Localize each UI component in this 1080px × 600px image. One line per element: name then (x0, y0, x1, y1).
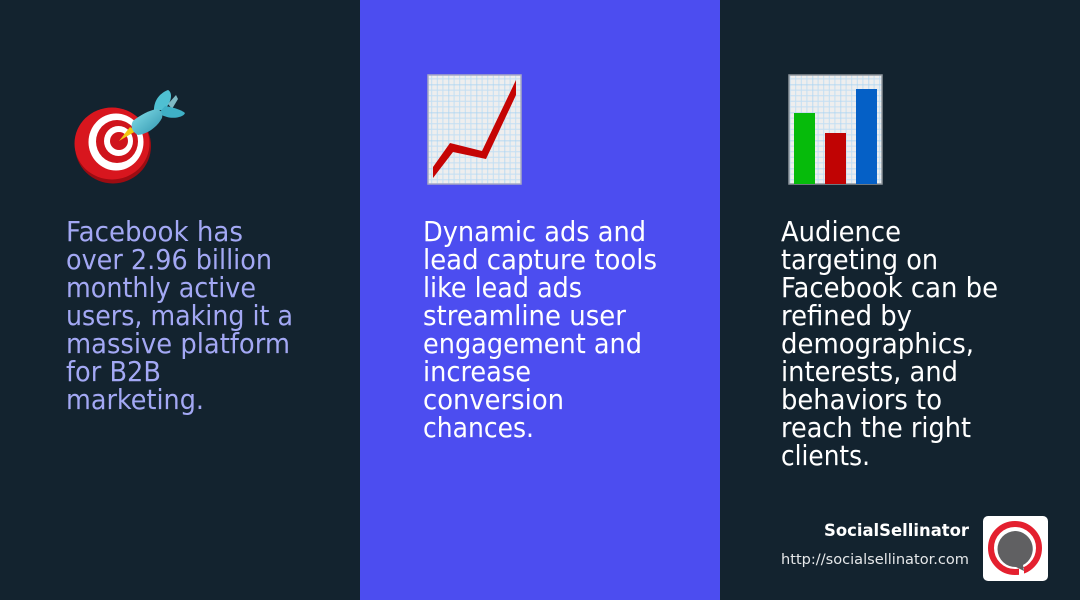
text: dynamic ads: lead capture tools (423, 243, 657, 276)
text: Facebook users: users, making it a (66, 299, 293, 332)
brand name: SocialSellinator (824, 521, 970, 541)
text: audience targeting: Audience (781, 215, 901, 248)
text: audience targeting: Facebook can be (781, 271, 998, 304)
text: dynamic ads: Dynamic ads and (423, 215, 646, 248)
text: dynamic ads: chances. (423, 411, 534, 444)
text: Facebook users: monthly active (66, 271, 256, 304)
text: audience targeting: behaviors to (781, 383, 942, 416)
text: dynamic ads (423, 215, 657, 444)
text: Facebook users: Facebook has (66, 215, 243, 248)
text: Facebook users: massive platform (66, 327, 290, 360)
text: dynamic ads: increase (423, 355, 531, 388)
logo (983, 516, 1048, 581)
icon: bar chart (789, 75, 882, 184)
brand url: http://socialsellinator.com (781, 552, 969, 568)
text: audience targeting: demographics, (781, 327, 974, 360)
text: dynamic ads: like lead ads (423, 271, 582, 304)
text: audience targeting: interests, and (781, 355, 958, 388)
panel: left background (0, 0, 360, 600)
text: audience targeting: reach the right (781, 411, 971, 444)
panel: middle background (360, 0, 720, 600)
panel: right background (720, 0, 1080, 600)
icon: rising line chart (428, 75, 521, 184)
text: Facebook users: for B2B (66, 355, 161, 388)
text: audience targeting: targeting on (781, 243, 938, 276)
text: dynamic ads: streamline user (423, 299, 626, 332)
text: dynamic ads: engagement and (423, 327, 642, 360)
text: audience targeting: refined by (781, 299, 912, 332)
text: Facebook users (66, 215, 293, 416)
text: Facebook users: marketing. (66, 383, 204, 416)
text: Facebook users: over 2.96 billion (66, 243, 272, 276)
icon: dart and target (74, 90, 185, 184)
text: audience targeting: clients. (781, 439, 870, 472)
text: dynamic ads: conversion (423, 383, 564, 416)
text: audience targeting (781, 215, 998, 472)
